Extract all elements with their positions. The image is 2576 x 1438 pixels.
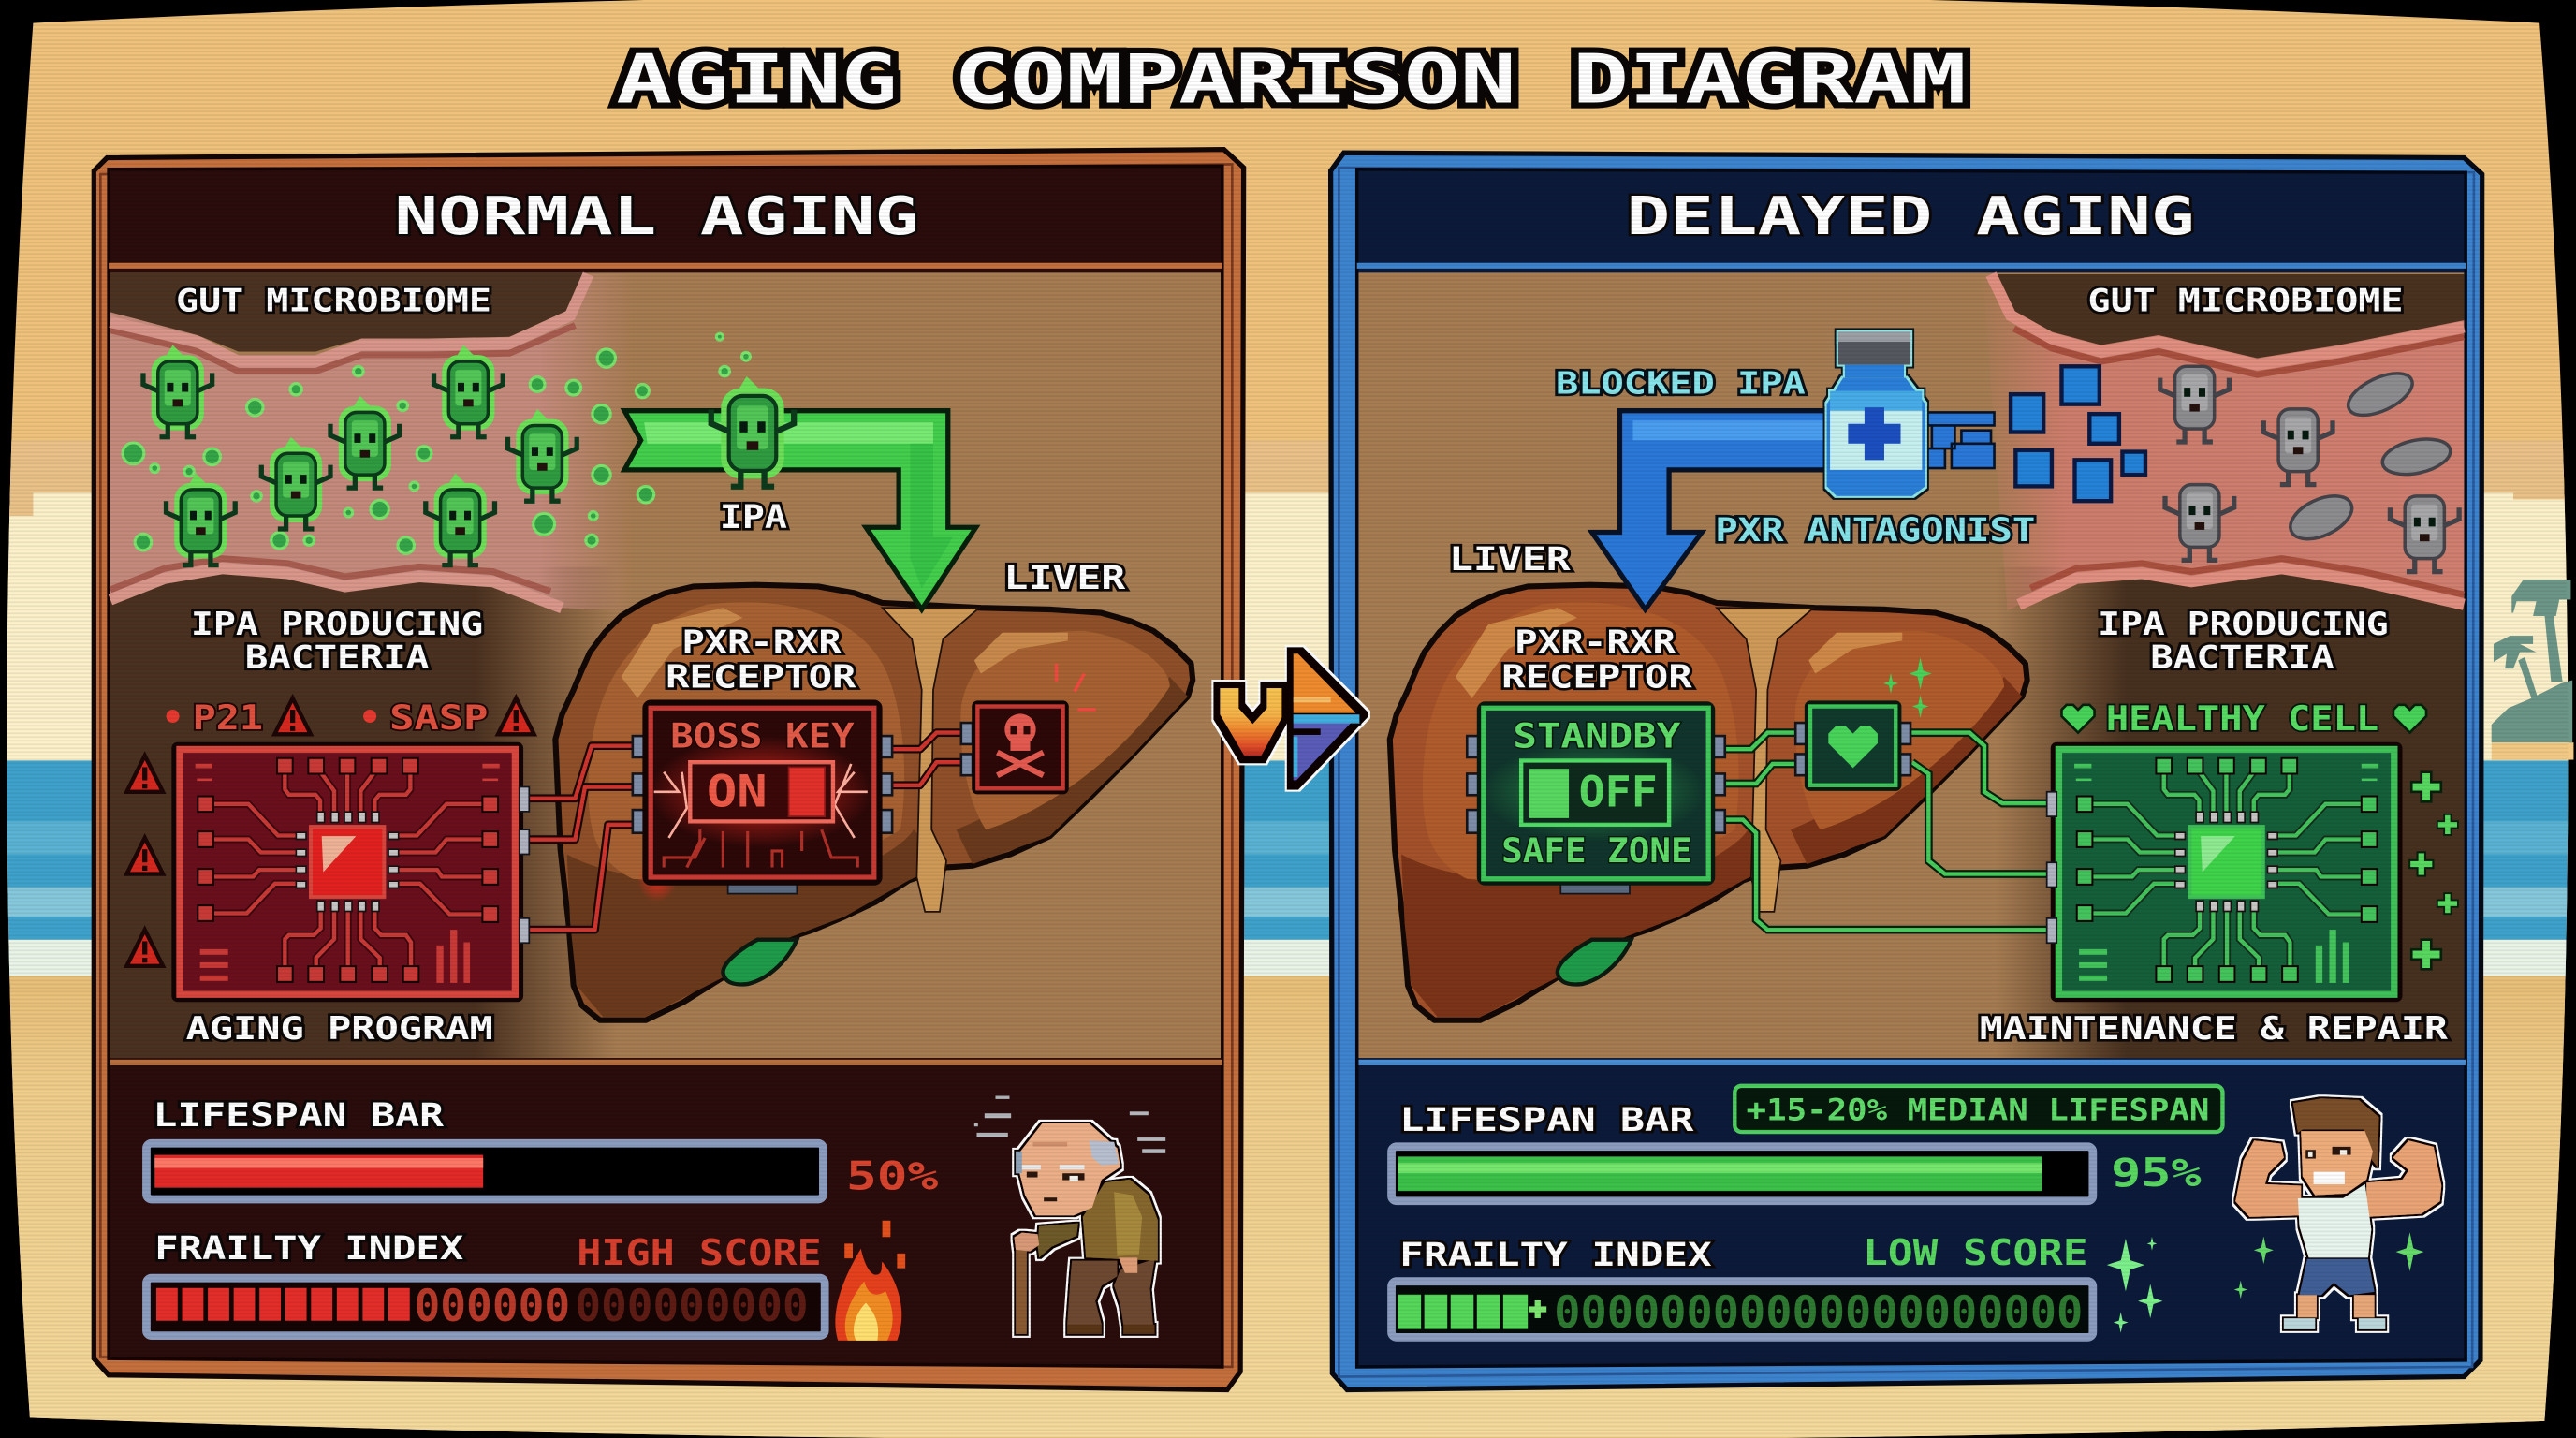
label: IPA producing bacteria — [191, 606, 483, 676]
panel background: normal aging lab — [110, 272, 1221, 1058]
label: IPA producing bacteria: IPA PRODUCING — [191, 606, 483, 643]
old man sprite — [974, 1096, 1165, 1334]
label: maintenance and repair: MAINTENANCE & REPAIR — [1980, 1010, 2448, 1048]
label: healthy cell: HEALTHY CELL — [2106, 698, 2378, 739]
inactive grey bacteria — [2160, 350, 2459, 572]
label: PXR-RXR receptor — [1501, 624, 1692, 696]
IPA arrow to liver — [624, 411, 976, 609]
frailty bar: high score — [146, 1278, 825, 1336]
icon: skull and crossbones — [997, 713, 1044, 775]
label: blocked IPA: BLOCKED IPA — [1556, 364, 1806, 401]
label: IPA: IPA — [720, 498, 787, 536]
badge: median lifespan: +15-20% MEDIAN LIFESPAN — [1747, 1093, 2209, 1128]
motion lines — [974, 1096, 1165, 1153]
panel: normal aging — [94, 150, 1244, 1389]
label: PXR-RXR receptor: PXR-RXR — [1515, 624, 1676, 662]
versus icon — [1215, 649, 1367, 788]
label: lifespan bar: LIFESPAN BAR — [153, 1096, 445, 1135]
toggle: off: OFF — [1579, 768, 1658, 817]
lifespan bar: 95% — [1392, 1147, 2093, 1201]
chip: aging program — [175, 745, 529, 999]
wires: standby to healthy cell — [1719, 733, 2048, 930]
label: PXR-RXR receptor: PXR-RXR — [682, 624, 842, 662]
IPA producing bacteria sprites — [143, 345, 577, 565]
label: IPA producing bacteria: BACTERIA — [2150, 638, 2334, 676]
standby switch box — [1467, 705, 1910, 894]
frailty bar: high score: 000000 — [414, 1281, 570, 1332]
warning icons column — [126, 756, 163, 966]
label: IPA producing bacteria: IPA PRODUCING — [2098, 606, 2389, 643]
gut tissue: delayed — [1983, 274, 2464, 611]
label: PXR antagonist: PXR ANTAGONIST — [1715, 511, 2035, 550]
label: frailty index: FRAILTY INDEX — [1399, 1236, 1712, 1274]
frailty bar: low score: 00000000000000000000 — [1554, 1287, 2083, 1339]
blue antagonist cubes — [2011, 366, 2145, 501]
P21 marker: P21 — [193, 697, 263, 738]
label: lifespan bar: LIFESPAN BAR — [1399, 1101, 1694, 1139]
green metabolite particles — [123, 333, 750, 553]
label: healthy cell — [2061, 698, 2426, 739]
label: liver: LIVER — [1003, 559, 1126, 597]
heart status box — [1807, 703, 1899, 788]
blocked IPA arrow — [1592, 411, 1832, 609]
heading: normal aging: NORMAL AGING — [394, 186, 918, 247]
sparkles above heart — [1883, 657, 1932, 718]
label: IPA producing bacteria: BACTERIA — [245, 638, 430, 676]
label: high score: HIGH SCORE — [577, 1232, 822, 1274]
label: standby: STANDBY — [1513, 715, 1681, 756]
wires: chip to boss key — [526, 733, 966, 930]
liver: delayed — [1390, 585, 2027, 1020]
bacterium on arrow — [711, 376, 794, 487]
gut tissue: normal — [110, 272, 649, 611]
arrow highlight — [1632, 420, 1832, 440]
label: low score: LOW SCORE — [1863, 1232, 2088, 1274]
skull warning box — [974, 703, 1066, 792]
toggle: off — [1521, 760, 1669, 825]
sparkles: low score — [2107, 1237, 2162, 1333]
alert sparks — [1057, 664, 1096, 710]
title: AGING COMPARISON DIAGRAM — [616, 40, 1967, 119]
label: frailty index: FRAILTY INDEX — [154, 1229, 463, 1268]
P21 marker — [167, 697, 311, 738]
panel: delayed aging — [1331, 153, 2482, 1389]
boss key switch box — [633, 703, 973, 902]
frailty bar: low score — [1392, 1282, 2093, 1339]
label: boss key: BOSS KEY — [670, 715, 856, 756]
liver: normal — [555, 585, 1193, 1020]
label: PXR-RXR receptor: RECEPTOR — [666, 658, 856, 696]
inactive grey blobs — [2284, 365, 2453, 548]
frailty bar: high score: 000000000 — [575, 1281, 809, 1332]
drug bottle: PXR antagonist — [1827, 331, 1925, 496]
value: 50%: 50% — [846, 1152, 939, 1198]
label: gut microbiome: GUT MICROBIOME — [2088, 283, 2403, 320]
repair plus icons — [2409, 772, 2458, 969]
label: IPA producing bacteria — [2098, 606, 2389, 676]
panel background: delayed lab — [1358, 272, 2464, 1058]
icon: palm trees on island — [2492, 580, 2573, 760]
label: aging program: AGING PROGRAM — [186, 1010, 493, 1048]
broken arrow fragments — [1925, 412, 1995, 468]
label: safe zone: SAFE ZONE — [1501, 830, 1692, 871]
toggle: on: ON — [707, 767, 768, 818]
SASP marker — [363, 697, 534, 738]
label: PXR-RXR receptor — [666, 624, 856, 696]
label: liver: LIVER — [1449, 540, 1572, 579]
icon: flame — [835, 1221, 905, 1341]
sparkles: muscle man — [2234, 1232, 2423, 1299]
value: 95%: 95% — [2111, 1150, 2202, 1196]
label: gut microbiome: GUT MICROBIOME — [176, 283, 491, 320]
SASP marker: SASP — [389, 697, 488, 738]
badge: median lifespan — [1734, 1086, 2222, 1132]
lifespan bar: 50% — [146, 1143, 823, 1199]
muscular young man sprite — [2235, 1098, 2441, 1329]
toggle: on — [690, 762, 833, 821]
heading: delayed aging: DELAYED AGING — [1626, 186, 2195, 247]
icon: green heart — [1828, 726, 1878, 768]
chip: maintenance and repair — [2047, 745, 2399, 999]
label: PXR-RXR receptor: RECEPTOR — [1501, 658, 1692, 696]
